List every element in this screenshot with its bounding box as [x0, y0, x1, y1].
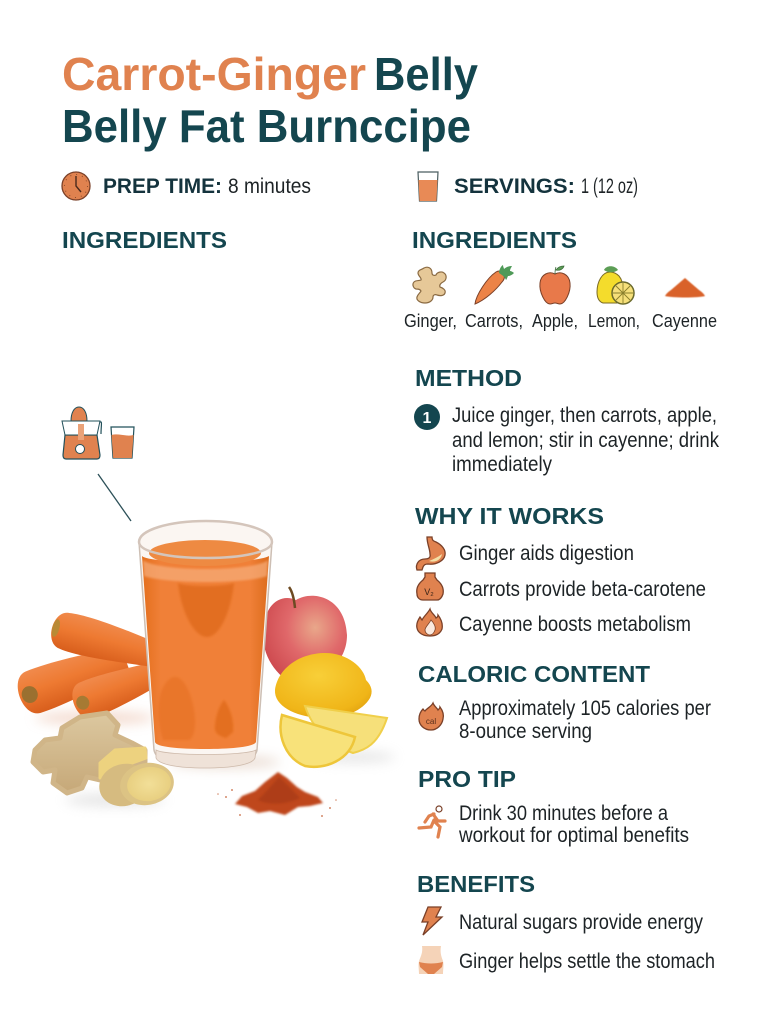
section: caloric content: [418, 661, 711, 743]
servings: [418, 172, 638, 201]
connector line: [98, 474, 131, 521]
benefit item 2: Ginger helps settle the stomach: [459, 949, 715, 973]
ingredient labels: [404, 310, 717, 331]
icon: apple: [540, 266, 570, 304]
prep time: [62, 172, 311, 200]
servings: 1 (12 oz): [581, 174, 638, 198]
cayenne powder: [217, 772, 337, 817]
ingredient labels: Carrots,: [465, 310, 523, 331]
ingredient labels: Lemon,: [588, 310, 640, 331]
icon: cayenne powder: [665, 278, 705, 298]
prep time text: PREP TIME:: [103, 175, 222, 198]
icon: waist: [419, 946, 443, 974]
title: [62, 48, 478, 152]
icon: clock: [62, 172, 90, 200]
servings text: SERVINGS:: [454, 175, 575, 198]
calorie text: Approximately 105 calories per: [459, 696, 711, 720]
lemon and wedges: [275, 653, 387, 767]
step text: Juice ginger, then carrots, apple,: [452, 403, 717, 427]
ingredient icons: [413, 265, 705, 304]
icon: flame: [417, 609, 442, 636]
benefit item 1: Natural sugars provide energy: [459, 910, 703, 934]
shadows: [35, 712, 395, 806]
ingredient labels: Cayenne: [652, 310, 717, 331]
heading: METHOD: [415, 365, 522, 391]
ingredient labels: Apple,: [532, 310, 578, 331]
title: Belly Fat Burnccipe: [62, 100, 471, 152]
icon: carrot: [475, 265, 514, 304]
photo: juice and ingredients: [12, 521, 395, 817]
section: why it works: [415, 503, 706, 636]
glass of juice: [139, 521, 272, 768]
icon: glass: [418, 172, 438, 201]
icon: calorie flame: [419, 703, 443, 730]
heading: PRO TIP: [418, 766, 516, 792]
section: pro tip: [418, 766, 689, 847]
icon: vitamin sack: V₂: [424, 587, 434, 597]
heading: WHY IT WORKS: [415, 503, 604, 529]
heading: ingredients right: INGREDIENTS: [412, 227, 577, 253]
icon: runner: [419, 806, 445, 837]
icon: stomach: [416, 537, 445, 570]
tip text: [458, 801, 689, 847]
apple: [263, 587, 347, 687]
title: Belly: [374, 48, 478, 100]
icon: lemon: [597, 266, 634, 304]
icon: vitamin sack: [417, 573, 443, 600]
tip text: Drink 30 minutes before a: [459, 801, 668, 825]
calorie text: [459, 696, 711, 743]
icon: juicer and glass: [62, 407, 134, 459]
section: benefits: [417, 871, 715, 974]
step text: [452, 403, 719, 476]
why it works item 3: Cayenne boosts metabolism: [459, 612, 691, 636]
section: method: [414, 365, 719, 476]
heading: BENEFITS: [417, 871, 535, 897]
heading: ingredients left: INGREDIENTS: [62, 227, 227, 253]
tip text: workout for optimal benefits: [458, 823, 689, 847]
icon: lightning: [422, 907, 442, 935]
why it works item 2: Carrots provide beta-carotene: [459, 577, 706, 601]
step number: 1: [423, 410, 432, 427]
icon: ginger: [413, 267, 446, 303]
prep time: 8 minutes: [228, 174, 311, 198]
step number: [414, 404, 440, 430]
calorie text: 8-ounce serving: [459, 719, 592, 743]
icon: calorie flame: cal: [426, 717, 436, 726]
carrots: [12, 609, 161, 723]
step text: and lemon; stir in cayenne; drink: [452, 428, 719, 452]
ingredient labels: Ginger,: [404, 310, 457, 331]
step text: immediately: [452, 452, 552, 476]
heading: CALORIC CONTENT: [418, 661, 650, 687]
ginger: [33, 713, 177, 812]
why it works item 1: Ginger aids digestion: [459, 541, 634, 565]
title: Carrot-Ginger: [62, 48, 366, 100]
